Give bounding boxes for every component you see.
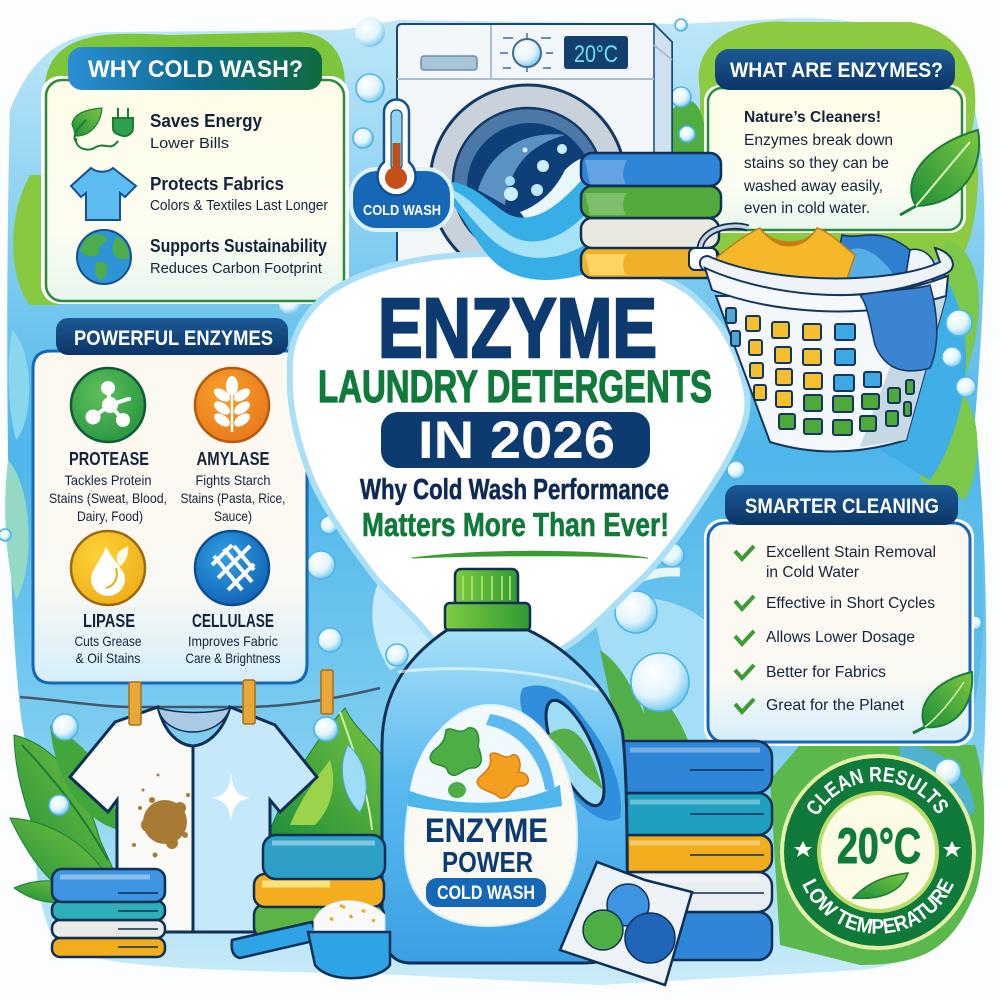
row: protects fabrics: Protects Fabrics (150, 174, 284, 194)
card (33, 351, 307, 683)
row: saves energy (72, 108, 262, 152)
card (704, 519, 974, 746)
row: protects fabrics (71, 168, 328, 220)
towels stack: right of bottle (550, 741, 772, 960)
checklist: in Cold Water (766, 564, 860, 581)
towels stack: middle (254, 835, 385, 938)
row: saves energy: Saves Energy (150, 111, 262, 131)
title: in 2026 pill (381, 411, 650, 470)
row: supports sustainability: Supports Sustainability (150, 236, 327, 256)
collar (158, 708, 230, 732)
shirt left half (70, 707, 193, 932)
lipase: Cuts Grease (74, 633, 142, 649)
row: protects fabrics: Colors & Textiles Last Longer (150, 197, 328, 214)
towels stack: left (52, 869, 165, 957)
icon: leaf (900, 130, 979, 215)
subtitle: line 2: Matters More Than Ever! (362, 506, 669, 543)
amylase (180, 368, 286, 524)
stain (132, 774, 190, 858)
title: in 2026 pill: IN 2026 (418, 411, 615, 470)
label: POWER (442, 847, 533, 879)
badge: clean results 20°C low temperature: 20°C (837, 818, 921, 874)
header (725, 485, 958, 525)
rim (700, 248, 953, 295)
card (41, 76, 349, 304)
orange enzyme (477, 753, 528, 798)
green enzyme (430, 728, 481, 775)
cellulase: CELLULASE (192, 611, 274, 631)
cellulase: Care & Brightness (186, 650, 280, 666)
protease: Tackles Protein (64, 472, 152, 488)
checklist: Great for the Planet (766, 697, 905, 714)
foliage: left of shirt (10, 725, 118, 903)
icon: thermometer and cold wash label (351, 100, 592, 280)
protease: Dairy, Food) (77, 508, 143, 524)
amylase: Stains (Pasta, Rice, (180, 490, 286, 506)
description text: washed away easily, (743, 178, 883, 195)
checklist: Better for Fabrics (766, 664, 886, 681)
protease: PROTEASE (69, 449, 149, 469)
panel: powerful enzymes (33, 318, 307, 683)
clothesline (20, 688, 380, 707)
lipase (71, 531, 145, 666)
green underline (412, 551, 648, 558)
label (405, 705, 577, 926)
icon: detergent pod packet (560, 862, 692, 985)
towels stack: top center (581, 153, 721, 278)
water swirl (435, 176, 592, 280)
bubbles around the page (0, 17, 982, 815)
description text: Nature’s Cleaners! (744, 109, 881, 126)
temperature display (564, 36, 628, 69)
row: supports sustainability (77, 230, 327, 284)
checklist: Effective in Short Cycles (766, 595, 935, 612)
body (382, 630, 627, 963)
laundry basket (689, 226, 953, 452)
description text: Enzymes break down (744, 132, 893, 149)
card (704, 85, 966, 233)
description text: even in cold water. (744, 200, 870, 217)
header: WHY COLD WASH? (88, 56, 303, 83)
protease: Stains (Sweat, Blood, (49, 490, 167, 506)
amylase: Sauce) (214, 508, 252, 524)
basket body (716, 296, 946, 452)
laundry detergent bottle (382, 569, 627, 963)
drawer (421, 56, 477, 70)
handle opening (520, 685, 621, 821)
dial (500, 33, 553, 72)
shirt right half (193, 707, 317, 932)
amylase: Fights Starch (196, 472, 270, 488)
basket holes (726, 308, 914, 435)
header (715, 49, 955, 90)
title: enzyme: ENZYME (378, 281, 657, 375)
header: WHAT ARE ENZYMES? (730, 59, 943, 82)
header (56, 318, 288, 355)
badge: clean results 20°C low temperature: CLEAN RESULTS (807, 767, 948, 814)
sparkle (212, 772, 250, 822)
badge: clean results 20°C low temperature (780, 754, 976, 950)
label text: ENZYME (425, 812, 548, 850)
door (430, 85, 626, 281)
row: supports sustainability: Reduces Carbon Footprint (150, 260, 323, 277)
clothes pegs (129, 670, 333, 725)
thermometer (378, 100, 415, 195)
cold wash pill (351, 169, 452, 230)
protease (49, 368, 167, 524)
cold wash pill: COLD WASH (363, 202, 441, 219)
machine body (397, 24, 672, 300)
header (68, 47, 322, 90)
cap (445, 569, 530, 631)
description text (743, 109, 893, 217)
handle (700, 226, 748, 250)
yellow shirt (708, 228, 855, 305)
temperature display: 20°C (574, 41, 618, 68)
panel: what are enzymes (704, 49, 979, 233)
lipase: LIPASE (83, 611, 135, 631)
checklist (735, 544, 936, 714)
header: POWERFUL ENZYMES (74, 327, 273, 350)
cellulase: Improves Fabric (188, 633, 278, 649)
panel: smarter cleaning (704, 485, 974, 746)
subtitle: line 1: Why Cold Wash Performance (360, 474, 669, 506)
t-shirt with stain (70, 707, 317, 932)
row: saves energy: Lower Bills (150, 135, 229, 152)
cellulase (186, 531, 280, 666)
lipase: & Oil Stains (76, 650, 140, 666)
header: SMARTER CLEANING (745, 495, 939, 518)
checklist: Allows Lower Dosage (766, 629, 915, 646)
detergent scoop (232, 901, 390, 978)
draped towel (860, 285, 937, 371)
description text: stains so they can be (744, 155, 889, 172)
icon: leaf (913, 672, 972, 733)
foliage: right of shirt (270, 708, 395, 840)
panel: center title droplet (290, 254, 748, 650)
checklist: Excellent Stain Removal (766, 544, 936, 561)
blue clothes (830, 235, 945, 300)
title: laundry detergents: LAUNDRY DETERGENTS (318, 361, 712, 412)
badge: clean results 20°C low temperature: LOW TEMPERATURE (802, 878, 954, 934)
washing machine (397, 24, 672, 300)
amylase: AMYLASE (196, 449, 270, 469)
label: COLD WASH (437, 883, 535, 904)
panel: why cold wash (41, 47, 349, 304)
